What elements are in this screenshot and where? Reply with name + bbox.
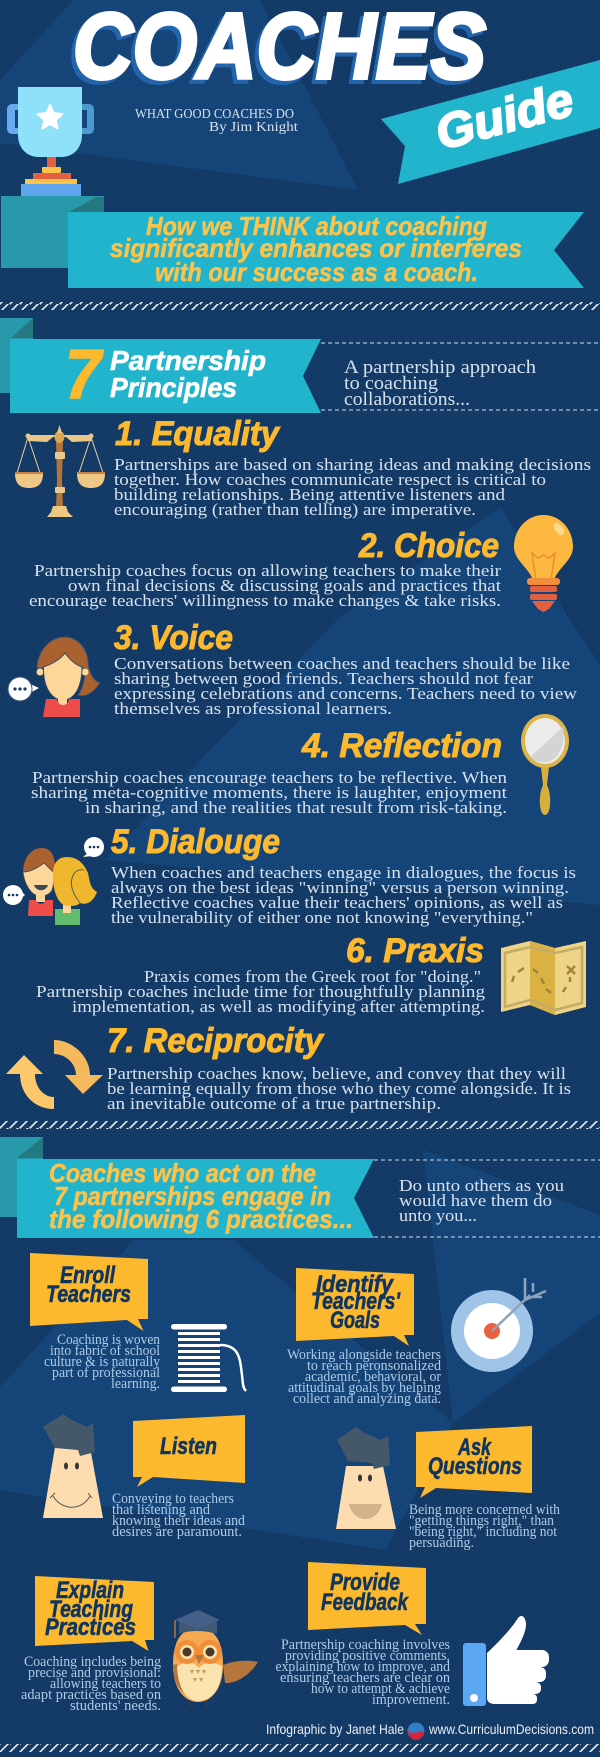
text: ask description: "getting things right," than: [409, 1513, 555, 1529]
text: ask description: "being right," including not: [409, 1524, 557, 1540]
banner: coaches who act on the 7 partnerships: 7 partnerships engage in: [54, 1181, 331, 1211]
text: identify description: academic, behavioral, or: [305, 1369, 441, 1385]
icon: thread spool: [171, 1324, 246, 1392]
subtitle: WHAT GOOD COACHES DO: [135, 106, 294, 121]
text: voice description: Conversations between coaches and teachers should be like: [114, 654, 570, 673]
icon: light bulb: [514, 515, 573, 612]
callout: Provide Feedback: [308, 1562, 426, 1635]
heading: 3. Voice: 3. Voice: [114, 619, 233, 657]
text: explain description: students' needs.: [70, 1698, 161, 1714]
text: dialogue description: [111, 863, 576, 927]
callout: Explain Teaching Practices: [35, 1576, 154, 1651]
text: explain description: allowing teachers to: [50, 1676, 161, 1692]
text: identify description: Working alongside teachers: [287, 1347, 441, 1363]
title: COACHES: COACHES: [69, 0, 482, 102]
text: feedback description: ensuring teachers are clear on: [280, 1670, 451, 1686]
practice: provide feedback: [276, 1562, 549, 1708]
banner: 7 partnership principles: A partnership approach: [344, 358, 536, 378]
practice: listen: [43, 1414, 246, 1540]
text: enroll description: into fabric of school: [50, 1343, 160, 1359]
practice: ask questions: [336, 1426, 561, 1551]
banner: 7 partnership principles: to coaching: [344, 374, 438, 394]
text: enroll description: Coaching is woven: [57, 1332, 161, 1348]
text: choice description: own final decisions & discussing goals and practices that: [68, 576, 501, 595]
heading: 5. Dialouge: 5. Dialouge: [111, 823, 280, 861]
principle 7: reciprocity: [6, 1022, 571, 1113]
text: equality description: [114, 455, 591, 519]
text: reflection description: sharing meta-cognitive moments, there is laughter, enjoyment: [31, 783, 507, 802]
text: listen description: Conveying to teachers: [112, 1491, 234, 1507]
text: feedback description: explaining how to improve, and: [276, 1659, 451, 1675]
callout: Provide Feedback: Feedback: [321, 1589, 409, 1616]
icon: reciprocal arrows: [6, 1040, 103, 1109]
subtitle: By Jim Knight: [209, 120, 298, 135]
practice: enroll teachers: [30, 1253, 246, 1392]
banner: coaches who act on the 7 partnerships: [0, 1137, 600, 1238]
text: reflection description: in sharing, and the realities that result from risk-taking.: [85, 798, 507, 817]
banner: 7 partnership principles: 7: [65, 335, 104, 413]
icon: target with arrow: [451, 1278, 546, 1372]
text: enroll description: learning.: [111, 1376, 160, 1392]
icon: woman with speech bubble: [8, 637, 100, 717]
text: ask description: [409, 1502, 561, 1551]
principle 3: voice: [8, 619, 578, 718]
icon: scales: [15, 425, 105, 517]
callout: Enroll Teachers: [30, 1253, 148, 1331]
banner: Guide: [381, 60, 600, 184]
text: voice description: expressing celebrations and concerns. Teachers need to view: [114, 684, 578, 703]
icon: smiling face: [43, 1414, 103, 1518]
text: feedback description: how to attempt & achieve: [311, 1681, 450, 1697]
text: praxis description: Partnership coaches include time for thoughtfully planning: [36, 982, 486, 1001]
heading: 7. Reciprocity: 7. Reciprocity: [107, 1022, 325, 1060]
text: praxis description: implementation, as well as modifying after attempting.: [72, 997, 485, 1016]
text: dialogue description: When coaches and teachers engage in dialogues, the focus is: [111, 863, 576, 882]
text: reciprocity description: an inevitable outcome of a true partnership.: [107, 1094, 441, 1113]
text: listen description: [112, 1491, 246, 1540]
principle 6: praxis: [36, 932, 586, 1016]
banner: coaches who act on the 7 partnerships: unto you...: [399, 1206, 477, 1225]
icon: two people talking: [3, 837, 104, 925]
practice: explain teaching practices: [21, 1576, 258, 1714]
callout: Enroll Teachers: Enroll: [60, 1262, 116, 1289]
text: ask description: Being more concerned with: [409, 1502, 561, 1518]
heading: 4. Reflection: 4. Reflection: [301, 727, 502, 765]
text: choice description: encourage teachers' willingness to make changes & take risks.: [29, 591, 501, 610]
text: voice description: sharing between good friends. Teachers should not fear: [114, 669, 533, 688]
footer credit: [266, 1721, 594, 1740]
text: enroll description: [44, 1332, 161, 1392]
text: identify description: attitudinal goals by helping: [288, 1380, 441, 1396]
text: identify description: to reach peronsonalized: [307, 1358, 442, 1374]
text: equality description: together. How coaches communicate respect is critical to: [114, 470, 546, 489]
text: equality description: encouraging (rather than telling) are imperative.: [114, 500, 476, 519]
icon: thumbs up: [463, 1616, 549, 1706]
callout: Identify Teachers' Goals: Teachers': [311, 1288, 401, 1315]
text: equality description: Partnerships are based on sharing ideas and making decisions: [114, 455, 591, 474]
text: listen description: knowing their ideas and: [112, 1513, 246, 1529]
text: feedback description: improvement.: [372, 1692, 450, 1708]
banner: how we think about coaching: significantly enhances or interferes: [110, 233, 522, 263]
callout: Identify Teachers' Goals: Goals: [330, 1307, 380, 1334]
text: praxis description: Praxis comes from the Greek root for "doing.": [144, 967, 481, 986]
text: dialogue description: always on the best ideas "winning" versus a person winning.: [111, 878, 569, 897]
callout: Identify Teachers' Goals: Identify: [316, 1271, 394, 1298]
text: listen description: desires are paramount.: [112, 1524, 242, 1540]
banner: coaches who act on the 7 partnerships: would have them do: [399, 1191, 552, 1210]
text: identify description: collect and analyzing data.: [293, 1391, 441, 1407]
callout: Ask Questions: Questions: [428, 1453, 522, 1480]
icon: treasure map: [501, 941, 586, 1015]
text: feedback description: [276, 1637, 451, 1708]
text: explain description: adapt practices based on: [21, 1687, 162, 1703]
text: praxis description: [36, 967, 486, 1016]
banner: 7 partnership principles: [0, 318, 600, 413]
subtitle: [135, 106, 298, 135]
text: reciprocity description: Partnership coaches know, believe, and convey that they will: [107, 1064, 566, 1083]
banner: 7 partnership principles: collaborations...: [344, 390, 470, 410]
text: listen description: that listening and: [112, 1502, 211, 1518]
text: reflection description: Partnership coaches encourage teachers to be reflective. When: [32, 768, 508, 787]
callout: Explain Teaching Practices: Practices: [45, 1614, 136, 1641]
banner: 7 partnership principles: Partnership: [110, 345, 266, 376]
text: enroll description: culture & is naturally: [44, 1354, 161, 1370]
banner: how we think about coaching: [1, 196, 584, 288]
text: reciprocity description: [107, 1064, 571, 1113]
principle 2: choice: [29, 515, 573, 612]
principle 5: dialogue: [3, 823, 576, 927]
text: feedback description: Partnership coaching involves: [281, 1637, 450, 1653]
banner: how we think about coaching: with our success as a coach.: [155, 257, 478, 287]
banner: coaches who act on the 7 partnerships: Do unto others as you: [399, 1176, 565, 1195]
text: equality description: building relationships. Being attentive listeners and: [114, 485, 506, 504]
text: choice description: [29, 561, 501, 610]
text: feedback description: providing positive comments,: [285, 1648, 450, 1664]
icon: graduate owl: [173, 1610, 258, 1708]
heading: 1. Equality: 1. Equality: [115, 415, 281, 453]
callout: Identify Teachers' Goals: [296, 1268, 414, 1346]
banner: coaches who act on the 7 partnerships: the following 6 practices...: [49, 1204, 353, 1234]
heading: 6. Praxis: 6. Praxis: [346, 932, 484, 970]
text: identify description: [287, 1347, 442, 1407]
banner: how we think about coaching: How we THINK about coaching: [146, 211, 487, 241]
text: explain description: [21, 1654, 162, 1714]
banner: coaches who act on the 7 partnerships: Coaches who act on the: [49, 1158, 316, 1188]
banner: 7 partnership principles: Principles: [110, 372, 237, 403]
text: dialogue description: Reflective coaches value their teachers' opinions, as well as: [111, 893, 563, 912]
callout: Ask Questions: [416, 1426, 532, 1498]
text: reflection description: [31, 768, 508, 817]
text: enroll description: part of professional: [52, 1365, 160, 1381]
principle 1: equality: [15, 415, 591, 519]
icon: trophy: [7, 87, 94, 196]
icon: curriculum decisions logo: [408, 1722, 424, 1740]
text: explain description: Coaching includes being: [24, 1654, 161, 1670]
icon: face with open mouth: [336, 1427, 396, 1529]
icon: hand mirror: [521, 714, 569, 815]
callout: Explain Teaching Practices: Teaching: [49, 1596, 133, 1623]
heading: 2. Choice: 2. Choice: [358, 527, 499, 565]
banner: Guide: Guide: [430, 73, 579, 161]
text: voice description: themselves as professional learners.: [114, 699, 392, 718]
practice: identify teachers' goals: [287, 1268, 546, 1407]
text: explain description: precise and provisional:: [28, 1665, 161, 1681]
text: choice description: Partnership coaches focus on allowing teachers to make their: [34, 561, 501, 580]
callout: Enroll Teachers: Teachers: [46, 1281, 131, 1308]
text: reciprocity description: be learning equally from those who they come alongside. It is: [107, 1079, 571, 1098]
callout: Ask Questions: Ask: [457, 1434, 492, 1461]
text: dialogue description: the vulnerability of either one not knowing "everything.": [111, 908, 533, 927]
text: ask description: persuading.: [409, 1535, 474, 1551]
text: voice description: [114, 654, 578, 718]
callout: Listen: [133, 1415, 245, 1487]
callout: Listen: Listen: [160, 1433, 217, 1460]
footer credit: Infographic by Janet Hale: [266, 1721, 404, 1737]
callout: Explain Teaching Practices: Explain: [56, 1577, 124, 1604]
principle 4: reflection: [31, 714, 569, 817]
callout: Provide Feedback: Provide: [330, 1569, 400, 1596]
